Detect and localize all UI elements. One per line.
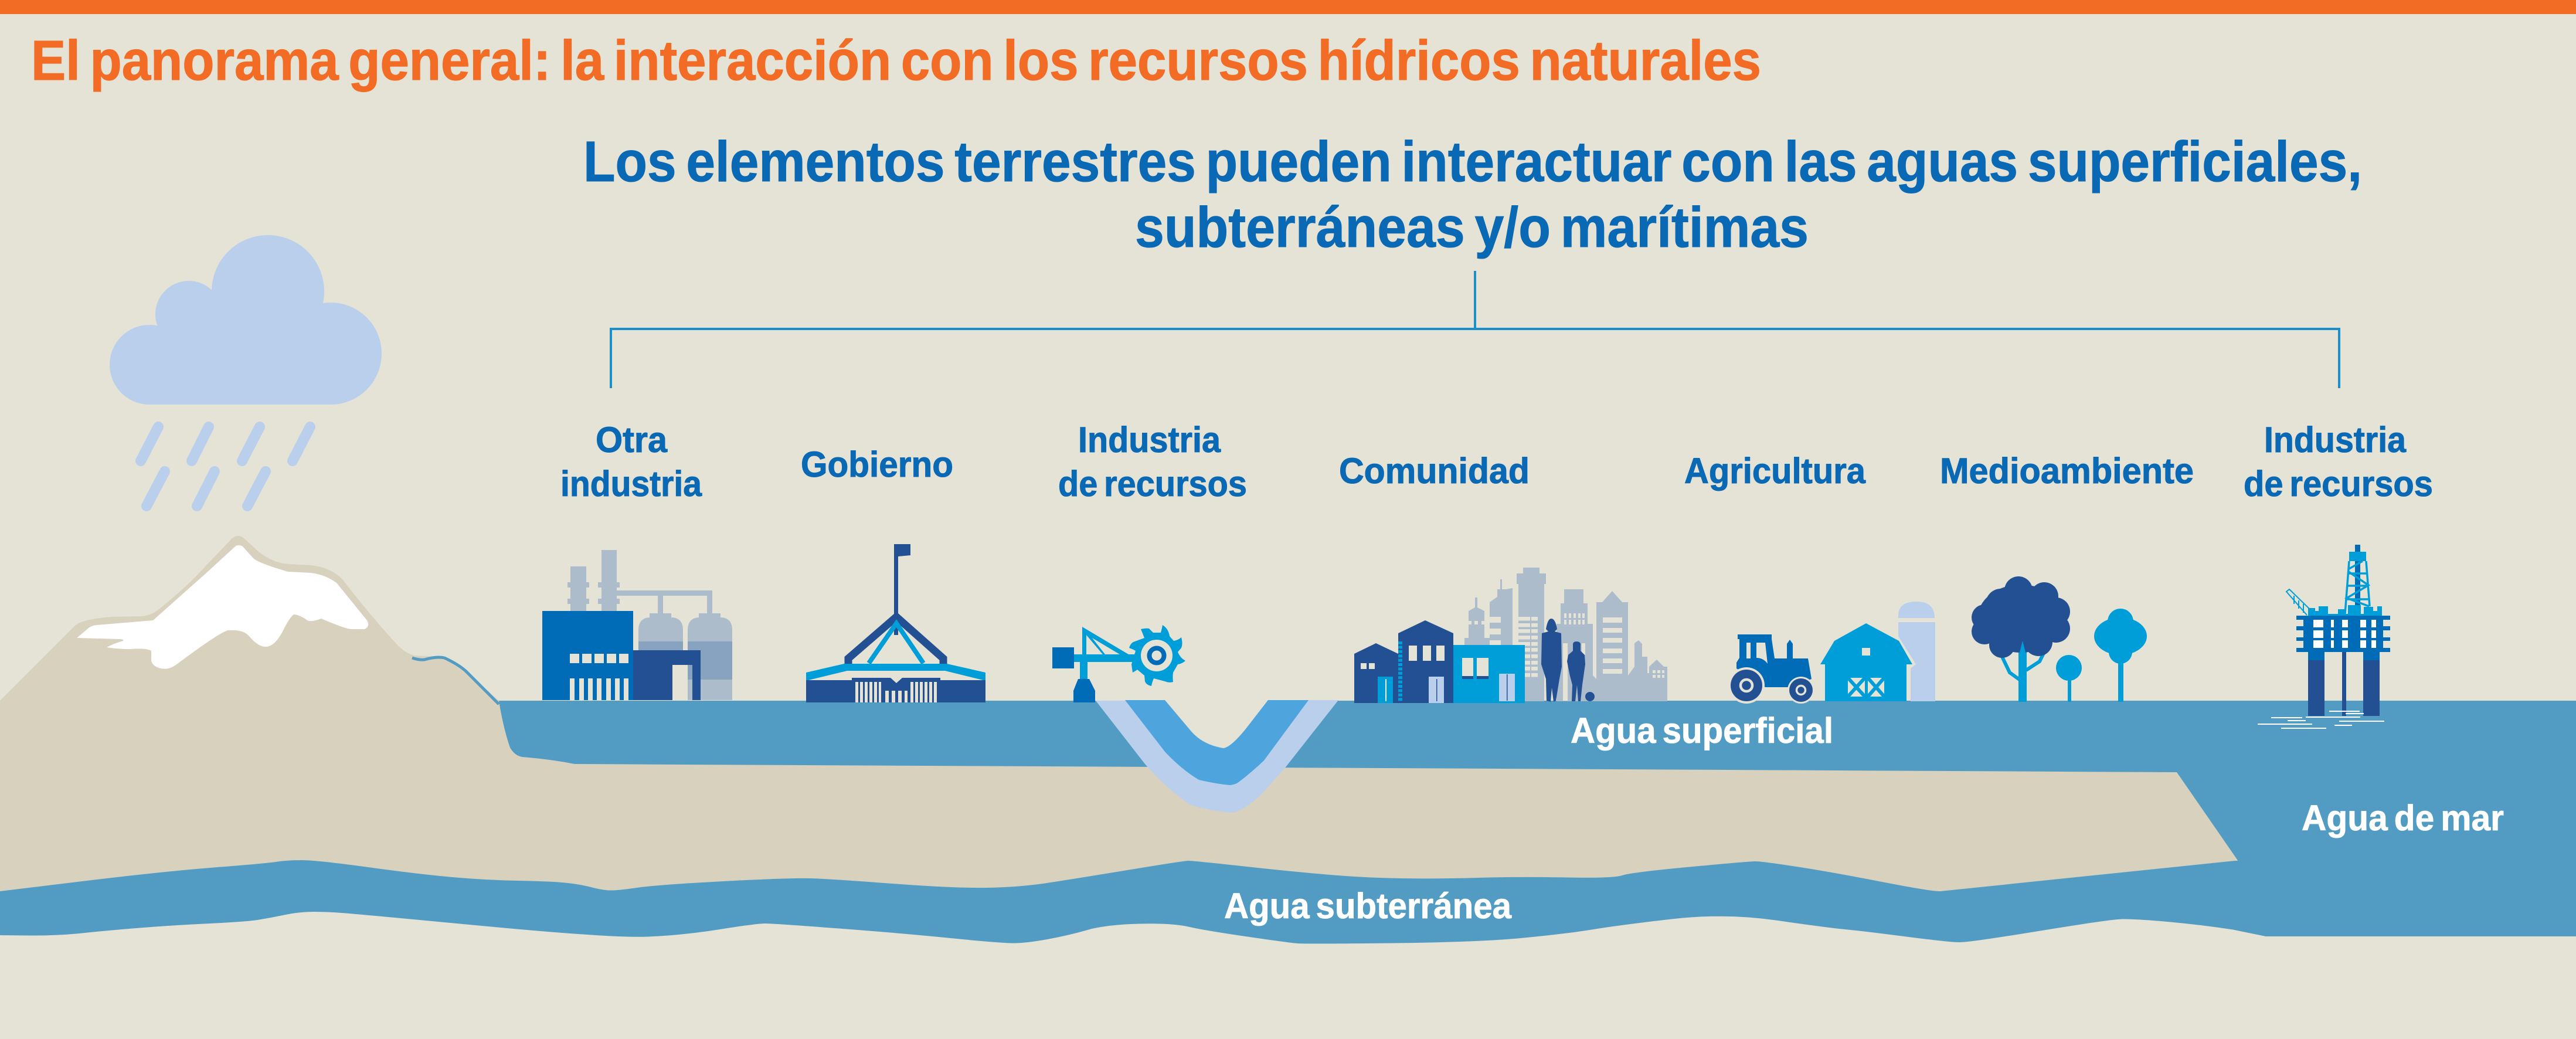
label: agua subterránea: Agua subterránea bbox=[1224, 886, 1512, 926]
label: agua superficial: Agua superficial bbox=[1571, 711, 1833, 751]
subtitle bbox=[583, 130, 2362, 259]
top orange bar bbox=[0, 0, 2576, 14]
icon: medium tree bbox=[2094, 609, 2147, 702]
icon: tractor bbox=[1728, 634, 1814, 704]
icon: mining excavator bbox=[1052, 625, 1185, 702]
label: industria de recursos (offshore): Industria bbox=[2264, 420, 2407, 460]
label: comunidad: Comunidad bbox=[1339, 451, 1530, 491]
surface water and sea bbox=[499, 701, 2576, 936]
icon: small tree bbox=[2056, 655, 2082, 702]
house 2 bbox=[1398, 620, 1453, 703]
title: El panorama general: la interacción con los recursos hídricos naturales bbox=[31, 29, 1761, 92]
house 3 bbox=[1453, 645, 1525, 703]
label: industria de recursos (offshore): de recursos bbox=[2244, 464, 2433, 504]
subtitle: subterráneas y/o marítimas bbox=[1135, 195, 1809, 259]
label: medioambiente: Medioambiente bbox=[1940, 451, 2194, 491]
icon: rain cloud bbox=[110, 235, 382, 506]
bracket connecting subtitle to land elements bbox=[611, 271, 2339, 388]
skyline bbox=[1464, 568, 1667, 701]
label: industria de recursos (mining): de recursos bbox=[1058, 464, 1247, 504]
land and mountain bbox=[0, 536, 2237, 903]
icon: factory bbox=[542, 550, 732, 700]
label: gobierno: Gobierno bbox=[801, 444, 953, 484]
groundwater band bbox=[0, 860, 2576, 943]
label: agua de mar: Agua de mar bbox=[2302, 798, 2504, 838]
icon: community city and houses bbox=[1354, 568, 1667, 703]
label: otra industria: Otra bbox=[596, 420, 668, 460]
label: industria de recursos (mining) bbox=[1058, 420, 1247, 504]
woman and child silhouettes bbox=[1541, 619, 1595, 702]
label: otra industria bbox=[560, 420, 702, 504]
subtitle: Los elementos terrestres pueden interactuar con las aguas superficiales, bbox=[583, 130, 2362, 193]
icon: barn and silo bbox=[1820, 602, 1935, 701]
icon: offshore oil rig bbox=[2258, 545, 2390, 728]
river from mountain bbox=[412, 657, 499, 704]
house 1 bbox=[1354, 643, 1398, 703]
icon: large tree bbox=[1972, 576, 2070, 702]
label: agricultura: Agricultura bbox=[1684, 451, 1866, 491]
label: industria de recursos (offshore) bbox=[2244, 420, 2433, 504]
mountain snow cap bbox=[77, 545, 368, 669]
water labels bbox=[1224, 711, 2504, 926]
icon: parliament house bbox=[806, 544, 985, 702]
label: otra industria: industria bbox=[560, 464, 702, 504]
category labels bbox=[560, 420, 2433, 504]
label: industria de recursos (mining): Industria bbox=[1078, 420, 1221, 460]
lake / mine pit bbox=[1096, 700, 1338, 813]
